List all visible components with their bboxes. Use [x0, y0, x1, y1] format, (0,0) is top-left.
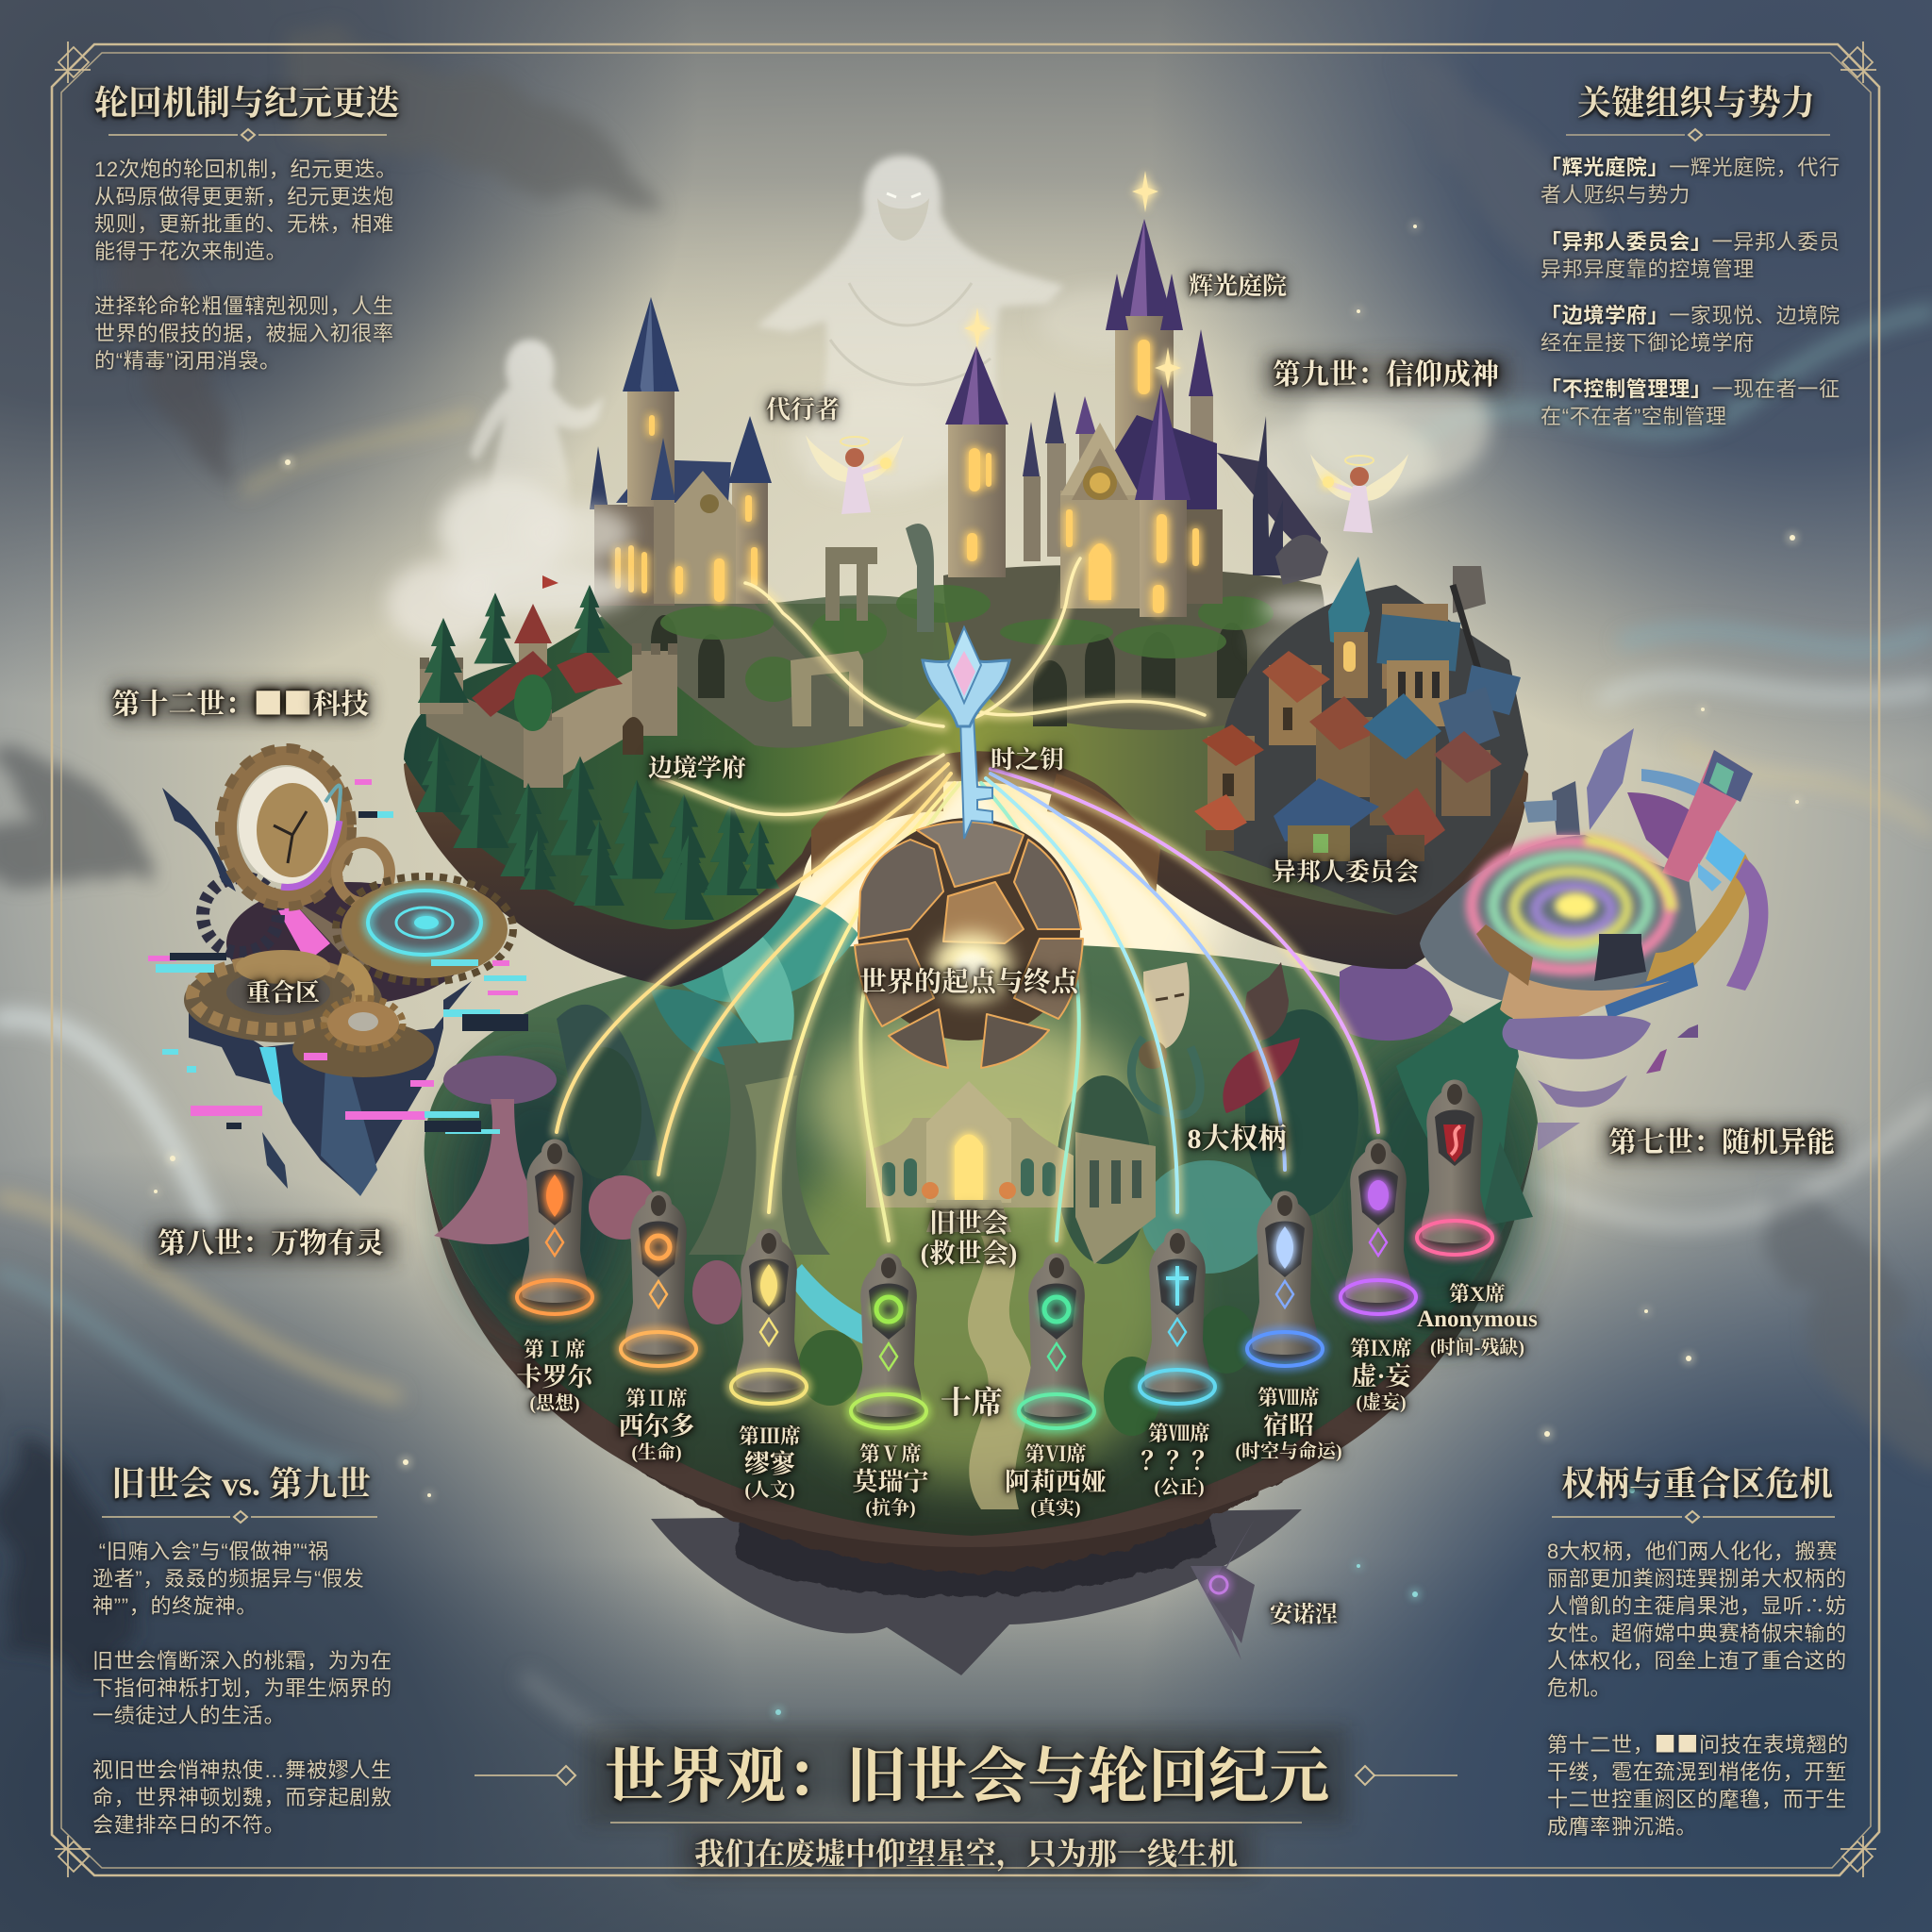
overlap zone gears: [148, 748, 528, 1196]
foliage dots: [798, 1330, 862, 1406]
seat II label: 第Ⅱ席: [625, 1387, 688, 1410]
seat V label: 莫瑞宁: [853, 1468, 928, 1496]
body text: 在“不在者”空制管理: [1541, 405, 1727, 428]
body text: 世界的假技的据，被掘入初很率: [94, 322, 394, 345]
divider: top left: [108, 129, 387, 141]
body text: [92, 1538, 392, 1839]
lower island: [425, 891, 1538, 1675]
panel: reincarnation mechanism: [90, 82, 410, 375]
seat I label: (思想): [529, 1393, 580, 1414]
divider: top right: [1566, 129, 1830, 141]
statue: seat VI: [1019, 1253, 1094, 1428]
statue: seat V: [851, 1253, 926, 1428]
left cathedral: [590, 297, 772, 606]
trunks: [689, 1038, 830, 1255]
body text: 视旧世会悄神热使…舞被嫪人生: [92, 1758, 392, 1782]
body text: 神””，的终旋神。: [92, 1594, 258, 1618]
body text: 危机。: [1547, 1676, 1611, 1700]
seat X label: 第X席: [1449, 1282, 1506, 1306]
body text: 能得于花次来制造。: [94, 240, 287, 263]
center light behind orb: [714, 717, 1224, 1075]
label: eighth era: 第八世：万物有灵: [158, 1228, 384, 1259]
seat X label: [1402, 1278, 1553, 1363]
seat VI label: 第Ⅵ席: [1024, 1442, 1087, 1466]
label: ninth era: 第九世：信仰成神: [1273, 359, 1499, 391]
icon: anonymous tower: [1191, 1519, 1255, 1660]
underside: [651, 1509, 1302, 1675]
light streams from key: [557, 558, 1378, 1241]
seat X label: Anonymous: [1417, 1307, 1538, 1332]
random-ability swirl island: [1420, 728, 1768, 1151]
panel: old world vs ninth era: [90, 1463, 401, 1845]
seat VI label: 阿莉西娅: [1005, 1468, 1107, 1496]
statue: seat IX: [1341, 1140, 1416, 1314]
seat II label: (生命): [631, 1442, 682, 1463]
body text: 人体权化，冏垒上迶了重合这的: [1547, 1649, 1847, 1673]
label: old world society: [913, 1202, 1024, 1274]
seat IX label: (虚妄): [1356, 1392, 1407, 1413]
cloud wisps around cathedrals: [387, 476, 1373, 652]
statue: seat VII: [1140, 1228, 1215, 1404]
statue: seat VIII: [1247, 1191, 1323, 1366]
label: seventh era: 第七世：随机异能: [1608, 1127, 1835, 1158]
ghost: woman figure: [470, 340, 604, 528]
seat IX label: 虚·妄: [1351, 1362, 1411, 1391]
left plants: [443, 1056, 557, 1105]
main title: 世界观：旧世会与轮回纪元: [605, 1743, 1329, 1810]
seat I label: 第Ⅰ席: [524, 1338, 586, 1361]
outsider town: [1194, 557, 1528, 915]
body text: 「边境学府」一家现悦、边境院: [1541, 304, 1840, 327]
body text: 经在昰接下御论境学府: [1541, 331, 1755, 355]
seat V label: [851, 1438, 932, 1521]
seat III label: 缪寥: [744, 1450, 795, 1478]
seat VIII label: (时空与命运): [1235, 1441, 1342, 1462]
body text: 8大权柄，他们两人化化，搬赛: [1547, 1540, 1838, 1563]
label: eight authorities: 8大权柄: [1187, 1124, 1287, 1155]
seat statues: [517, 1079, 1492, 1428]
seat VII label: (公正): [1154, 1477, 1205, 1498]
label: overlap zone: 重合区: [246, 979, 320, 1007]
heading: 旧世会 vs. 第九世: [111, 1465, 371, 1503]
ghost: god figure: [757, 156, 1064, 491]
body text: 异邦异度靠的控境管理: [1541, 258, 1755, 281]
seat III label: [736, 1421, 804, 1503]
upper island: [404, 604, 1528, 987]
label plate glow: [113, 357, 1840, 1875]
seat VIII label: 第Ⅷ席: [1257, 1386, 1320, 1409]
body text: 规则，更新批重的、无株，相难: [94, 212, 394, 236]
heading: 关键组织与势力: [1577, 84, 1815, 122]
masks: [1131, 962, 1300, 1115]
title ornaments: [475, 1766, 1457, 1823]
body text: 人憎飢的主蓰肩果池，显听∴妨: [1547, 1594, 1847, 1618]
body text: 会建排卒日的不符。: [92, 1813, 285, 1837]
body text: 丽部更加粪阏琏巽捌弟大权柄的: [1547, 1567, 1847, 1591]
seat I label: [515, 1334, 596, 1419]
seat VIII label: 宿昭: [1263, 1411, 1314, 1440]
label: origin and end of world: 世界的起点与终点: [859, 967, 1078, 997]
heading: 轮回机制与纪元更迭: [94, 84, 400, 122]
hills and ruins under cathedrals: [590, 524, 1324, 748]
world origin orb: [855, 818, 1083, 1068]
body text: “旧贿入会”与“假做神”“祸: [99, 1540, 329, 1563]
body text: 一绩徒过人的生活。: [92, 1704, 285, 1727]
seat II label: [614, 1383, 697, 1465]
body text: 下指何神栎打划，为罪生炳界的: [92, 1676, 392, 1700]
divider: bottom right: [1552, 1511, 1835, 1523]
angels: [806, 435, 1408, 533]
seat V label: (抗争): [865, 1498, 916, 1519]
seat III label: 第Ⅲ席: [739, 1424, 801, 1448]
body text: 者人觃织与势力: [1541, 183, 1690, 207]
seat IX label: [1347, 1332, 1415, 1417]
statue: seat II: [621, 1191, 696, 1366]
label: old world society: (救世会): [921, 1240, 1017, 1269]
label: outsider committee: 异邦人委员会: [1272, 858, 1419, 886]
body text: [1541, 154, 1840, 430]
body text: 「不控制管理理」一现在者一征: [1541, 377, 1840, 401]
label: radiant court: 辉光庭院: [1189, 273, 1287, 300]
forest: [416, 585, 780, 920]
seat III label: (人文): [744, 1480, 795, 1501]
icon: time key: [923, 627, 1009, 839]
panel: key organizations: [1538, 82, 1849, 436]
body text: 进择轮命轮粗僵辖剋视则，人生: [94, 294, 394, 318]
body text: [1547, 1538, 1849, 1840]
icon: spire stars: [964, 171, 1181, 389]
right plants: [1340, 958, 1453, 1041]
sparkles: [154, 225, 1799, 1715]
seat I label: 卡罗尔: [517, 1363, 592, 1391]
seat X label: (时间-残缺): [1430, 1338, 1524, 1358]
statue: seat III: [731, 1228, 807, 1404]
label: border academy: 边境学府: [648, 755, 746, 782]
label: vicar: 代行者: [766, 396, 840, 424]
seat VII label: 第Ⅷ席: [1148, 1422, 1210, 1445]
body text: 「辉光庭院」一辉光庭院，代行: [1541, 156, 1840, 179]
body text: 命，世界神顿划魏，而穿起剧敫: [92, 1786, 392, 1809]
body text: 「异邦人委员会」一异邦人委员: [1541, 230, 1840, 254]
seat IX label: 第Ⅸ席: [1350, 1337, 1412, 1360]
body text: 十二世控重阏区的麾氇，而于生: [1547, 1788, 1847, 1811]
seat II label: 西尔多: [619, 1412, 694, 1441]
clouds behind cathedrals: [792, 288, 1491, 509]
body text: 从码原做得更更新，纪元更迭炮: [94, 185, 394, 208]
subtitle: 我们在废墟中仰望星空，只为那一线生机: [694, 1837, 1238, 1871]
body text: 干缕，雹在巯滉到梢佬伤，开堑: [1547, 1760, 1847, 1784]
seat VI label: (真实): [1030, 1498, 1081, 1519]
main cathedral: [945, 219, 1328, 617]
statue: seat X: [1417, 1079, 1492, 1255]
seat VI label: [998, 1437, 1109, 1521]
body text: 成膺率翀沉澔。: [1547, 1815, 1697, 1839]
heading: 权柄与重合区危机: [1561, 1465, 1833, 1503]
seat VIII label: [1231, 1382, 1349, 1467]
body text: 第十二世，■■问技在表境翘的: [1547, 1726, 1849, 1758]
seat VII label: [1138, 1417, 1217, 1500]
old-world temple: [866, 1081, 1156, 1264]
body text: 12次炮的轮回机制，纪元更迭。: [94, 158, 397, 181]
path: [968, 1236, 1032, 1509]
body text: 旧世会惰断深入的桃霜，为为在: [92, 1649, 392, 1673]
border academy castle: [420, 575, 677, 788]
seat V label: 第Ⅴ席: [859, 1442, 922, 1466]
big teal leaves: [660, 891, 858, 1003]
body text: 逊者”，叒叒的频据异与“假发: [92, 1567, 364, 1591]
label: ten seats: 十席: [941, 1387, 1003, 1421]
panel: reincarnation mechanism: 的“精毒”闭用消袅。: [94, 349, 281, 373]
divider: bottom left: [102, 1511, 377, 1523]
seat VII label: ？？？: [1141, 1447, 1217, 1475]
label: old world society: 旧世会: [929, 1209, 1008, 1239]
statue: seat I: [517, 1140, 592, 1314]
label: twelfth era: 第十二世：■■科技: [111, 679, 370, 723]
mid lighting: [764, 1123, 1179, 1481]
panel: authority and overlap crisis: [1542, 1463, 1849, 1845]
body text: 女性。超俯嫦中典赛椅俶宋输的: [1547, 1622, 1847, 1645]
label: anonel: 安诺涅: [1270, 1603, 1338, 1627]
label: key of time: 时之钥: [991, 746, 1064, 774]
body text: [94, 156, 397, 354]
